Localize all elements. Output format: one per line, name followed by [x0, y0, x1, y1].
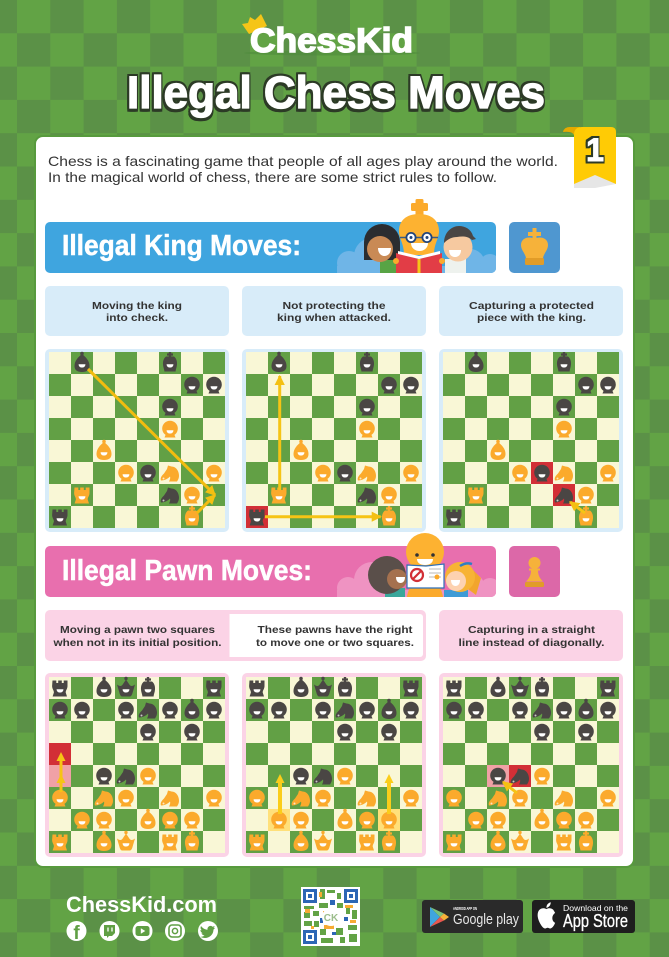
icon box: pawn [509, 546, 560, 597]
chess board: capturing protected piece [439, 349, 623, 532]
arrow: right pawn [384, 774, 394, 814]
badge: Google Play: ANDROID APP ON [453, 906, 477, 911]
arrow: king captures knight [570, 502, 585, 513]
chess board: king not protected [242, 349, 426, 532]
caption group: pawn two squares [45, 610, 426, 661]
logo: ChessKid: ChessKid [250, 22, 413, 60]
icon: twitter [198, 921, 218, 941]
arrow: king move [197, 495, 215, 513]
chess board: illegal double pawn move [45, 673, 229, 857]
illustration: pawn and kids reading [337, 533, 496, 597]
note box: pawns' right: These pawns have the right [258, 624, 413, 636]
page-number ribbon [563, 127, 616, 188]
arrow: left pawn [276, 774, 284, 814]
caption: capturing a protected piece: piece with the king. [477, 312, 586, 324]
illustration: king and kids reading [337, 199, 500, 279]
footer: website: ChessKid.com [66, 892, 217, 917]
title: Illegal Chess Moves [127, 67, 545, 118]
icon: twitch [100, 921, 120, 941]
caption group: pawn two squares: when not in its initial position. [52, 637, 222, 649]
QR code: CK [324, 913, 339, 924]
caption: capturing a protected piece: Capturing a protected [469, 300, 594, 312]
chess board: king into check [45, 349, 229, 532]
arrow: pawn capture [503, 782, 517, 793]
icon: facebook: f [73, 923, 80, 944]
badge: Google Play [422, 900, 523, 933]
caption: capturing in straight line: Capturing in a straight [468, 624, 596, 636]
caption: not protecting the king: king when attacked. [277, 312, 391, 324]
icon: instagram [165, 921, 185, 941]
note box: pawns' right: to move one or two squares. [256, 637, 414, 649]
note box: pawns' right [230, 614, 423, 657]
chess board: straight capture [439, 673, 623, 857]
caption: not protecting the king [242, 286, 426, 336]
badge: Google Play: Google play [453, 911, 519, 928]
heading: Illegal Pawn Moves: Illegal Pawn Moves: [62, 555, 312, 587]
caption group: pawn two squares: Moving a pawn two squares [60, 624, 215, 636]
caption: capturing in straight line: line instead of diagonally. [458, 637, 605, 649]
icon: youtube [132, 921, 152, 941]
caption: not protecting the king: Not protecting the [282, 300, 386, 312]
social icons [66, 921, 218, 944]
caption: moving the king into check: Moving the king [92, 300, 182, 312]
QR code [301, 887, 360, 946]
intro text [48, 153, 558, 185]
main white panel [35, 136, 634, 867]
arrow: rook moves up [278, 376, 281, 490]
banner: Illegal King Moves [45, 199, 500, 279]
badge: App Store [532, 900, 635, 933]
banner: Illegal Pawn Moves [45, 533, 500, 603]
number 1: 1 [586, 132, 604, 168]
caption: moving the king into check: into check. [106, 312, 168, 324]
icon box: king [509, 222, 560, 273]
intro text: In the magical world of chess, there are some strict rules to follow. [48, 169, 497, 185]
arrow: pawn two squares [56, 752, 66, 792]
caption: capturing in straight line [439, 610, 623, 661]
heading: Illegal King Moves: Illegal King Moves: [62, 230, 301, 262]
icon: facebook [66, 921, 86, 944]
badge: App Store: App Store [563, 911, 628, 931]
chess board: valid double pawn moves [242, 673, 426, 857]
badge: App Store: Download on the [563, 903, 628, 913]
caption: moving the king into check [45, 286, 229, 336]
arrow: rook attacks along rank [265, 515, 381, 518]
caption: capturing a protected piece [439, 286, 623, 336]
intro text: Chess is a fascinating game that people of all ages play around the world. [48, 153, 558, 169]
arrow: bishop attack line [88, 369, 215, 495]
